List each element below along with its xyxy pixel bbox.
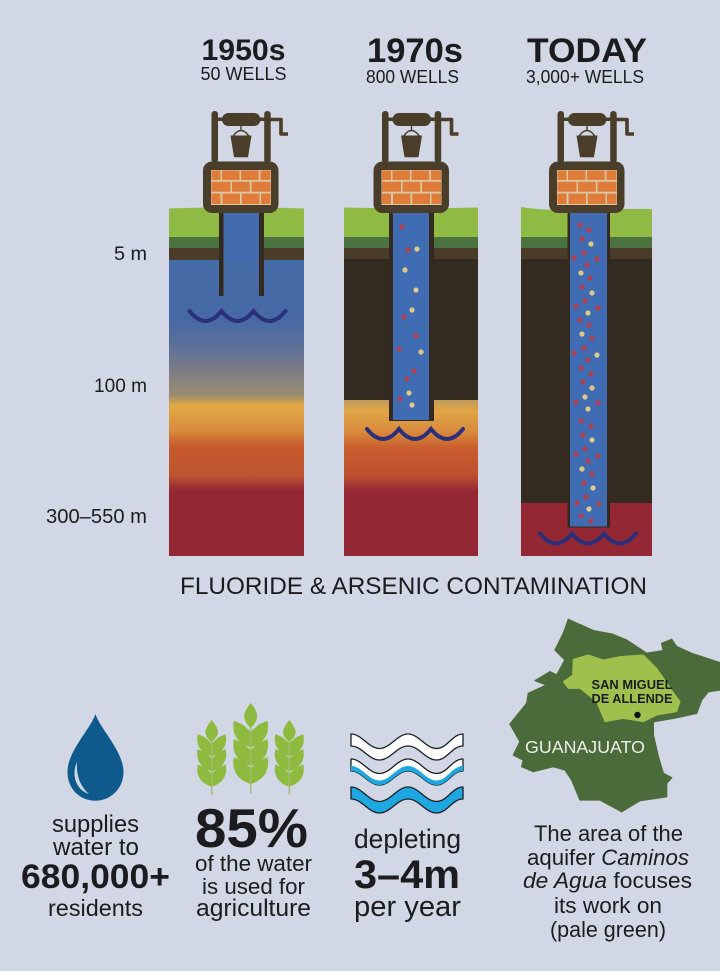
icon: well [203, 111, 288, 213]
icon: water drop [68, 714, 124, 801]
well shaft [219, 210, 264, 296]
text: supplies water: supplies [52, 812, 139, 838]
column heading: 1970s: 800 WELLS [366, 67, 459, 87]
column heading: 1950s: 1950s [202, 34, 286, 67]
text: 85 percent: 85% [195, 797, 308, 859]
water ripple [540, 534, 636, 544]
stat: agriculture share [195, 703, 313, 922]
depth labels: 300–550 m [46, 506, 147, 528]
region label: San Miguel de Allende: SAN MIGUEL [592, 677, 673, 692]
text: 85 percent: of the water [195, 851, 313, 876]
column heading: today [526, 32, 647, 87]
icon: depleting water waves [351, 734, 463, 813]
text: 85 percent [195, 797, 313, 922]
text: aquifer description: de Agua focuses [523, 868, 692, 893]
region label: San Miguel de Allende: DE ALLENDE [592, 691, 673, 706]
text: aquifer description: (pale green) [550, 917, 666, 942]
well shaft [389, 210, 434, 421]
text: depleting 3-4m [354, 824, 461, 923]
map: Guanajuato and San Miguel de Allende [510, 619, 720, 942]
wheat stalk centre [234, 703, 268, 793]
column heading: 1970s [366, 32, 463, 87]
stat: depletion rate [351, 734, 463, 923]
contamination caption: FLUORIDE & ARSENIC CONTAMINATION [180, 573, 647, 600]
depth labels: 100 m [94, 376, 147, 397]
water table gradient [344, 400, 478, 556]
ground layers [521, 207, 652, 556]
depth labels: 5 m [114, 243, 147, 265]
region label: Guanajuato: GUANAJUATO [525, 737, 645, 757]
column heading: 1950s [200, 34, 286, 84]
wheat stalk left [198, 720, 226, 795]
ground layers [344, 208, 478, 400]
text: 85 percent: agriculture [196, 895, 311, 922]
contaminant dots [571, 222, 602, 524]
icon: wheat [198, 703, 303, 795]
column heading: 1950s: 50 WELLS [200, 64, 286, 84]
panel: today cross-section [521, 111, 652, 556]
panel: 1950s cross-section [169, 111, 304, 556]
ground layers [169, 207, 304, 260]
region label: San Miguel de Allende [592, 677, 673, 706]
contaminant dots [396, 224, 424, 408]
text: depleting 3-4m: depleting [354, 824, 461, 854]
text: depleting 3-4m: 3–4m [354, 853, 460, 897]
water ripple [190, 311, 286, 321]
stat: residents supplied [21, 714, 170, 921]
text: supplies water: residents [48, 895, 143, 921]
water ripple [367, 429, 463, 439]
text: supplies water: water to [52, 834, 139, 861]
text: aquifer description: The area of the [534, 821, 683, 846]
text: supplies water [21, 812, 170, 921]
well shaft [568, 210, 610, 528]
depth labels [46, 243, 147, 528]
text: supplies water: 680,000+ [21, 858, 170, 896]
text: 85 percent: is used for [202, 874, 306, 899]
text: aquifer description: aquifer Caminos [527, 845, 689, 870]
text: depleting 3-4m: per year [354, 891, 461, 923]
Guanajuato state shape [510, 619, 720, 812]
text: aquifer description [523, 821, 692, 942]
wheat stalk right [275, 720, 303, 795]
column heading: today: TODAY [527, 32, 647, 70]
text: aquifer description: its work on [554, 893, 662, 918]
location marker [634, 712, 641, 718]
icon: well [549, 111, 634, 213]
water table gradient [169, 260, 304, 556]
icon: well [374, 111, 458, 213]
column heading: today: 3,000+ WELLS [526, 67, 644, 87]
column heading: 1970s: 1970s [367, 32, 463, 70]
panel: 1970s cross-section [344, 111, 478, 556]
